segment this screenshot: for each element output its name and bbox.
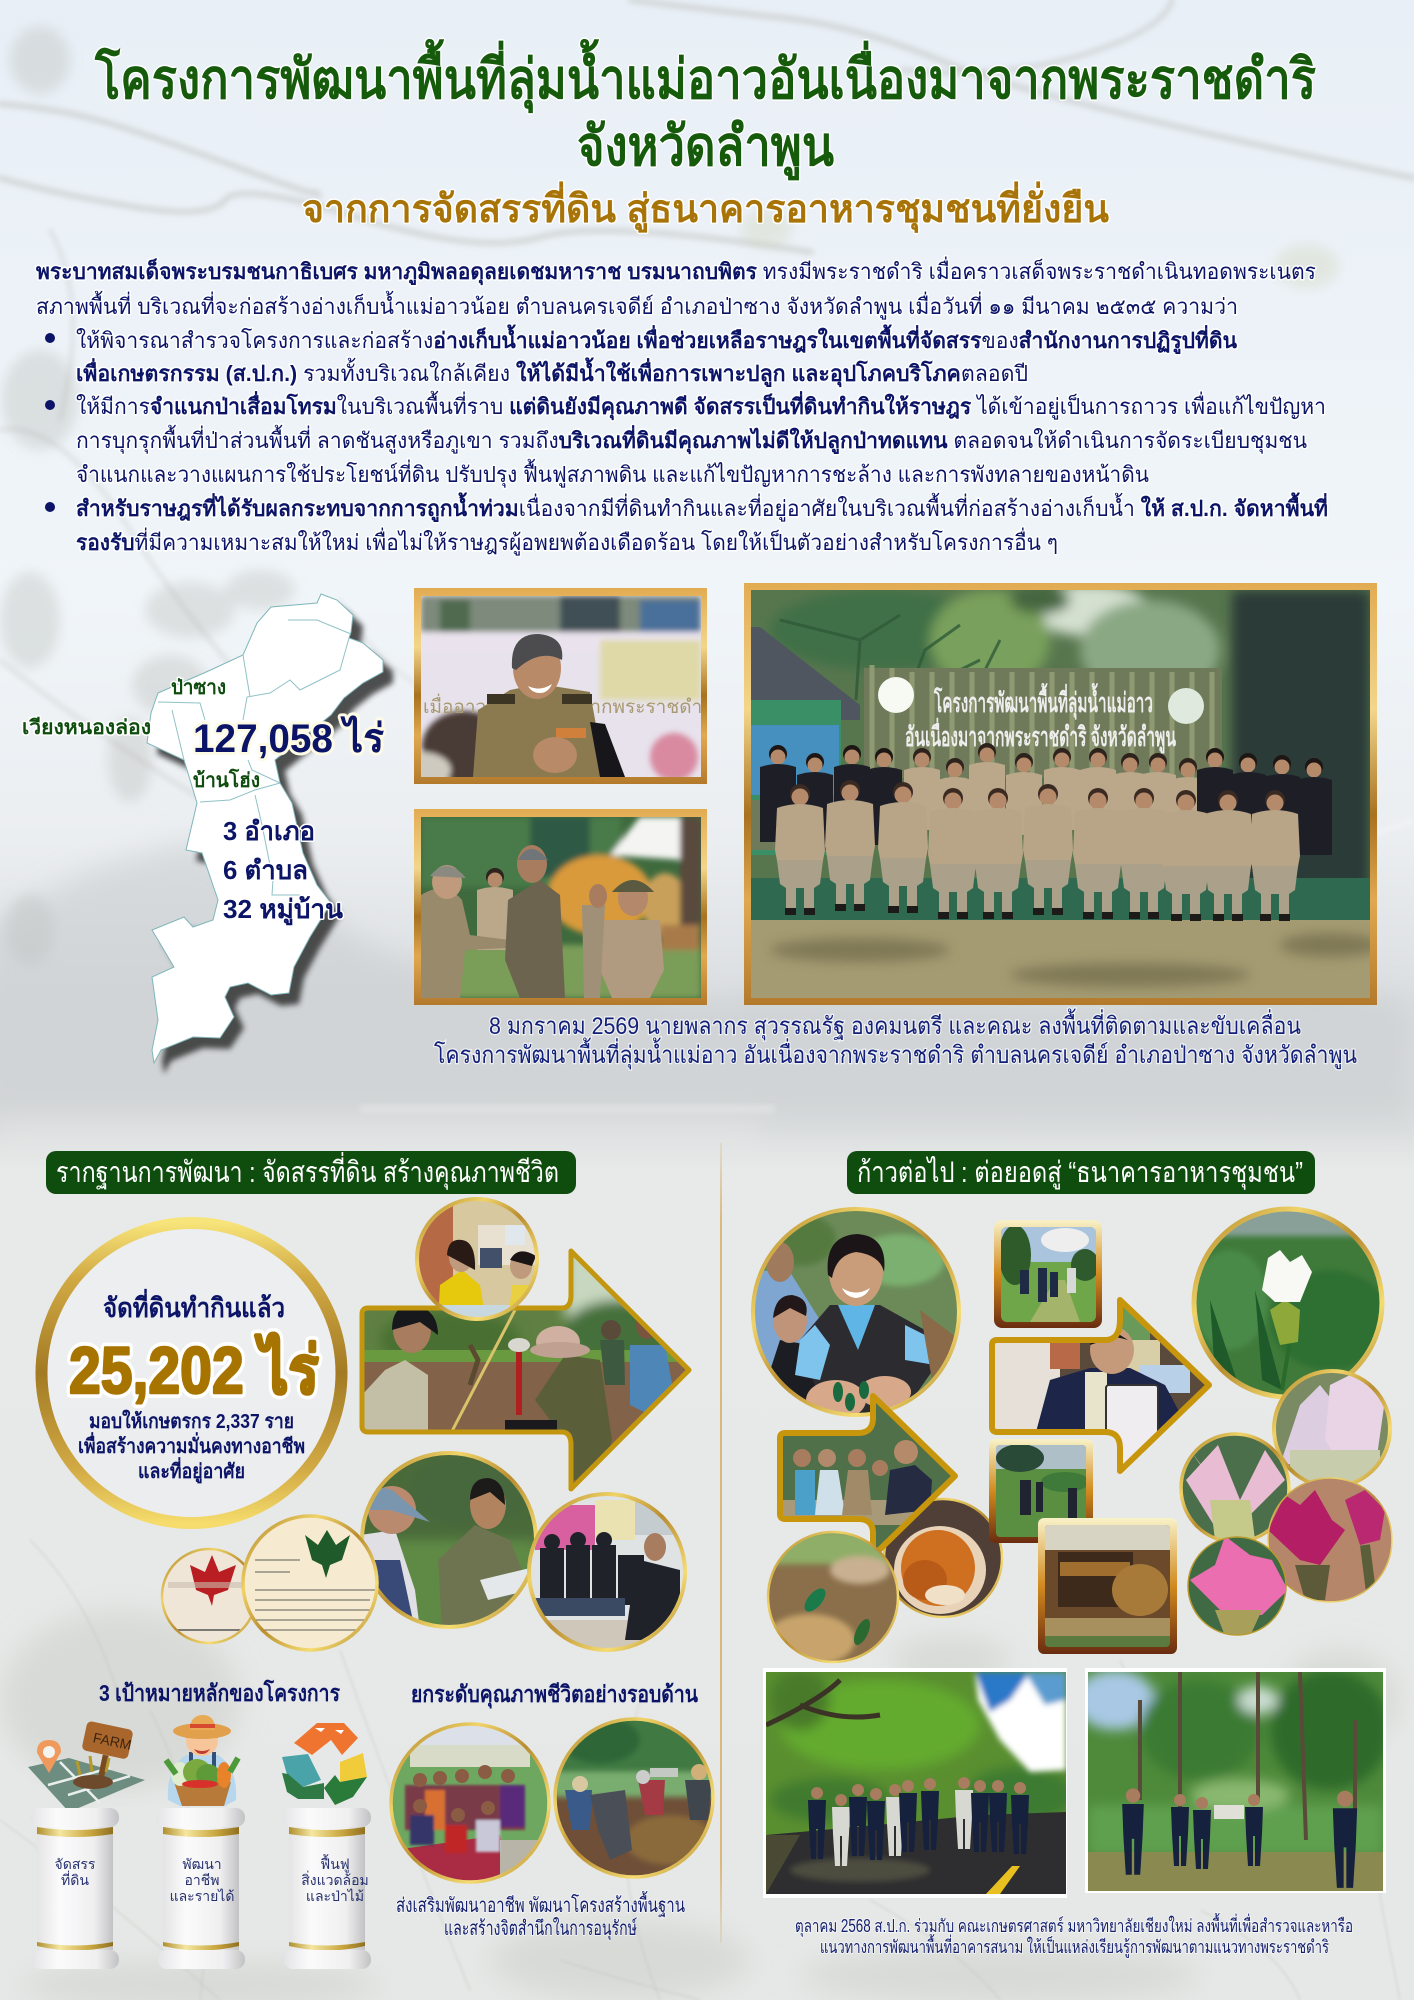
circle photo: jewel beetles	[765, 1530, 900, 1666]
intro text block: สภาพพื้นที่ บริเวณที่จะก่อสร้างอ่างเก็บน้ำแม่อาวน้อย ตำบลนครเจดีย์ อำเภอป่าซาง จังหวัดลำพูน เมื่อวันที่ ๑๑ มีนาคม ๒๕๓๕ ความว่า	[36, 291, 1238, 320]
photo: official at meeting	[414, 588, 707, 784]
arrow photo: land survey	[360, 1247, 695, 1498]
rounded photo: walking through field	[994, 1220, 1102, 1328]
callout: land allocated	[42, 1223, 342, 1523]
map of project area	[22, 594, 393, 1074]
map labels	[22, 677, 384, 926]
map labels: ป่าซาง	[171, 677, 226, 699]
circle photo: pink flower	[1179, 1432, 1291, 1544]
circle photo: seated audience	[526, 1494, 689, 1650]
title	[94, 39, 1316, 233]
icon: farm plot with sign: FARM	[92, 1729, 133, 1753]
caption: livelihood promotion: และสร้างจิตสำนึกในการอนุรักษ์	[444, 1917, 637, 1941]
circle photo: white curcuma flower	[1191, 1206, 1390, 1401]
photo caption	[434, 1008, 1357, 1070]
caption: October field survey	[795, 1913, 1353, 1958]
intro text block: จำแนกและวางแผนการใช้ประโยชน์ที่ดิน ปรับปรุง ฟื้นฟูสภาพดิน และแก้ไขปัญหาการชะล้าง และการพังทลายของหน้าดิน	[76, 459, 1149, 488]
intro text block: ให้มีการจำแนกป่าเสื่อมโทรมในบริเวณพื้นที่ราบ แต่ดินยังมีคุณภาพดี จัดสรรเป็นที่ดินทำกินให้ราษฎร ได้เข้าอยู่เป็นการถาวร เพื่อแก้ไขปัญหา	[76, 390, 1326, 421]
photo: group in front of bamboo sign	[744, 583, 1380, 1005]
goal pillar: livelihood	[156, 1808, 245, 1969]
icon: recycling environment	[282, 1723, 367, 1805]
circle photo: two men reading	[360, 1451, 538, 1630]
map labels: 127,058 ไร่	[193, 715, 384, 761]
goal pillar: livelihood: พัฒนา	[182, 1856, 222, 1872]
rounded photo: beehive	[1038, 1518, 1177, 1654]
circle photo: planting seedlings	[553, 1716, 716, 1882]
intro text block: เพื่อเกษตรกรรม (ส.ป.ก.) รวมทั้งบริเวณใกล้เคียง ให้ได้มีน้ำใช้เพื่อการเพาะปลูก และอุปโภคบริโภคตลอดปี	[76, 357, 1028, 388]
goal pillar: environment: และป่าไม้	[306, 1888, 364, 1904]
map labels: บ้านโฮ่ง	[193, 768, 260, 792]
goal pillar: land allocation: ที่ดิน	[61, 1871, 89, 1888]
callout: land allocated: 25,202 ไร่	[69, 1332, 319, 1407]
goal pillar: land allocation: จัดสรร	[55, 1856, 96, 1872]
callout: land allocated: เพื่อสร้างความมั่นคงทางอาชีพ	[78, 1431, 305, 1458]
photo: officials walking in garden	[414, 809, 707, 1005]
heading: quality of life: ยกระดับคุณภาพชีวิตอย่างรอบด้าน	[411, 1681, 698, 1709]
heading: development foundation: รากฐานการพัฒนา : จัดสรรที่ดิน สร้างคุณภาพชีวิต	[56, 1152, 559, 1190]
circle photo: larvae in coconut shell	[884, 1495, 1004, 1621]
callout: land allocated: และที่อยู่อาศัย	[138, 1456, 245, 1485]
goal pillar: land allocation	[30, 1808, 119, 1969]
goal pillar: livelihood: อาชีพ	[184, 1872, 220, 1888]
photo: group on tree-lined road	[763, 1668, 1075, 1898]
intro text block: รองรับที่มีความเหมาะสมให้ใหม่ เพื่อไม่ให้ราษฎรผู้อพยพต้องเดือดร้อน โดยให้เป็นตัวอย่างสำหรับโครงการอื่น ๆ	[76, 527, 1058, 556]
caption: livelihood promotion	[396, 1891, 685, 1941]
rounded photo: people in orchard	[989, 1439, 1093, 1543]
photo: survey in teak plantation	[1075, 1668, 1390, 1893]
intro text block: การบุกรุกพื้นที่ป่าส่วนพื้นที่ ลาดชันสูงหรือภูเขา รวมถึงบริเวณที่ดินมีคุณภาพไม่ดีให้ปลูกป่าทดแทน ตลอดจนให้ดำเนินการจัดระเบียบชุมชน	[76, 424, 1307, 455]
callout: land allocated: จัดที่ดินทำกินแล้ว	[103, 1288, 285, 1323]
caption: livelihood promotion: ส่งเสริมพัฒนาอาชีพ พัฒนาโครงสร้างพื้นฐาน	[396, 1891, 685, 1917]
goal pillar: environment	[282, 1808, 371, 1969]
map labels: เวียงหนองล่อง	[22, 716, 151, 739]
title: จังหวัดลำพูน	[577, 115, 834, 181]
arrow photo: woman with tablet	[990, 1295, 1212, 1477]
goal pillar: environment: ฟื้นฟู	[320, 1854, 350, 1873]
circle photo: woman in yellow at meeting	[415, 1196, 540, 1322]
heading: next step	[847, 1151, 1315, 1194]
circle photo: community group	[390, 1722, 552, 1884]
circle photo: magenta flower	[1267, 1476, 1394, 1603]
heading: three goals: 3 เป้าหมายหลักของโครงการ	[99, 1679, 341, 1706]
circle photo: bright pink flower	[1187, 1536, 1289, 1638]
title: จากการจัดสรรที่ดิน สู่ธนาคารอาหารชุมชนที่ยั่งยืน	[302, 181, 1109, 233]
callout: land allocated: 25,202 ไร่	[69, 1332, 319, 1407]
circle photo: land title document (green garuda)	[242, 1515, 380, 1651]
photo: group in front of bamboo sign: โครงการพัฒนาพื้นที่ลุ่มน้ำแม่อาว	[933, 682, 1153, 720]
photo: group in front of bamboo sign: อันเนื่องมาจากพระราชดำริ จังหวัดลำพูน	[905, 717, 1176, 754]
circle photo: smiling man with beetles	[751, 1207, 961, 1420]
map labels: 3 อำเภอ	[223, 816, 315, 846]
goal pillar: environment: สิ่งแวดล้อม	[301, 1871, 369, 1888]
icon: farm plot with sign	[28, 1721, 145, 1812]
circle photo: land title document (red garuda)	[162, 1545, 257, 1648]
intro text block: พระบาทสมเด็จพระบรมชนกาธิเบศร มหาภูมิพลอดุลยเดชมหาราช บรมนาถบพิตร ทรงมีพระราชดำริ เมื่อคราวเสด็จพระราชดำเนินทอดพระเนตร	[36, 256, 1316, 286]
map labels: 6 ตำบล	[223, 855, 308, 885]
goal pillar: livelihood: และรายได้	[170, 1888, 234, 1904]
arrow photo: officials at insect farm	[778, 1390, 960, 1562]
intro text block: สำหรับราษฎรที่ได้รับผลกระทบจากการถูกน้ำท่วมเนื่องจากมีที่ดินทำกินและที่อยู่อาศัยในบริเวณพื้นที่ก่อสร้างอ่างเก็บน้ำ ให้ ส.ป.ก. จัดหาพื้นที่	[76, 492, 1328, 523]
intro text block	[36, 256, 1328, 556]
photo: official at meeting: เมื่ออาว อันเนื่องมาจากพระราชดำริ จังหวัดลำพูน	[423, 693, 822, 718]
map labels: 32 หมู่บ้าน	[223, 894, 343, 926]
heading: development foundation	[46, 1151, 576, 1194]
intro text block: ให้พิจารณาสำรวจโครงการและก่อสร้างอ่างเก็บน้ำแม่อาวน้อย เพื่อช่วยเหลือราษฎรในเขตพื้นที่จัดสรรของสำนักงานการปฏิรูปที่ดิน	[76, 324, 1237, 355]
circle photo: pale pink flower	[1271, 1370, 1393, 1488]
heading: next step: ก้าวต่อไป : ต่อยอดสู่ “ธนาคารอาหารชุมชน”	[857, 1155, 1303, 1190]
callout: land allocated: มอบให้เกษตรกร 2,337 ราย	[89, 1409, 294, 1433]
photo caption: 8 มกราคม 2569 นายพลากร สุวรรณรัฐ องคมนตรี และคณะ ลงพื้นที่ติดตามและขับเคลื่อน	[489, 1008, 1301, 1041]
icon: farmer with vegetable basket	[166, 1715, 238, 1806]
